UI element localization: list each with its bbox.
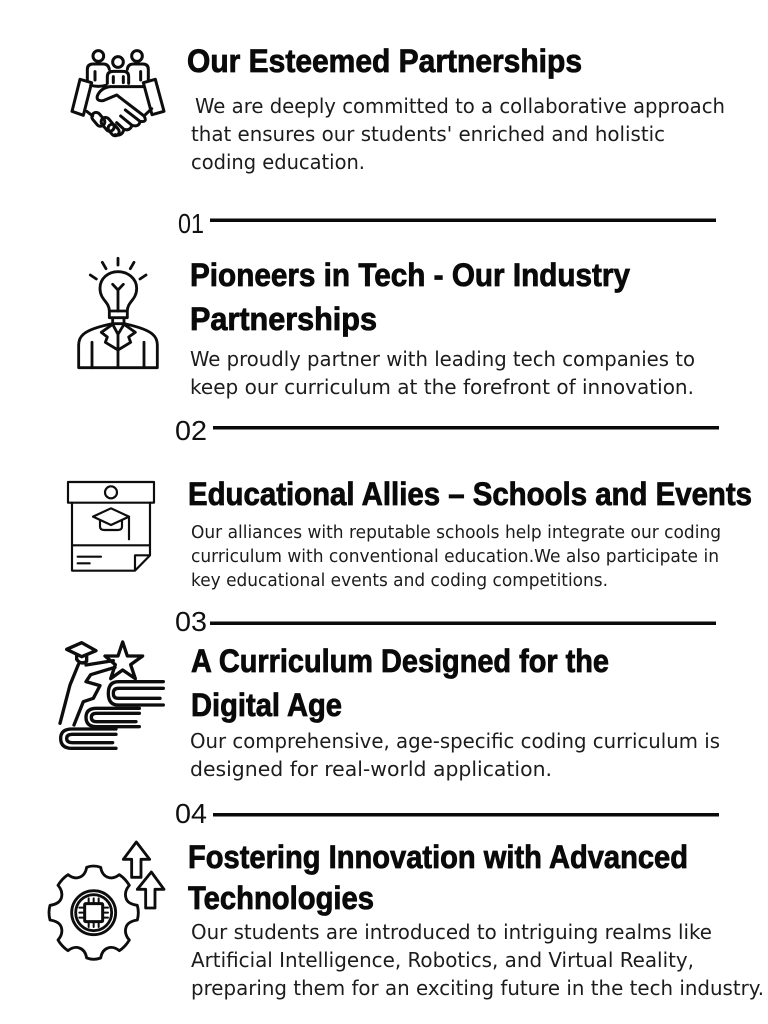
panel: curriculum (60, 642, 720, 781)
heading: Pioneers in Tech: Pioneers in Tech - Our Industry (190, 257, 630, 293)
text block: technologies description: Our students are introduced to intriguing realms like (191, 920, 712, 944)
text block: technologies description (191, 920, 764, 1000)
text block: technologies description: preparing them for an exciting future in the tech industry. (191, 976, 764, 1000)
text block: allies description: curriculum with conventional education.We also participate in (191, 547, 719, 567)
icon: gear with chip and up arrows (49, 842, 164, 959)
heading: Fostering Innovation (188, 839, 688, 916)
icon: graduation cap box (68, 482, 154, 571)
text block: allies description (191, 523, 721, 591)
text block: curriculum description: designed for real-world application. (190, 757, 552, 781)
heading: Our Esteemed Partnerships: Our Esteemed Partnerships (187, 43, 582, 79)
panel: educational allies (68, 476, 752, 591)
panel: industry partnerships (79, 257, 695, 399)
text block: industry description: keep our curriculum at the forefront of innovation. (190, 375, 694, 399)
text block: allies description: key educational events and coding competitions. (191, 571, 608, 591)
icon: handshake with three people (72, 51, 164, 137)
text block: technologies description: Artificial Intelligence, Robotics, and Virtual Reality, (191, 948, 694, 972)
heading: Pioneers in Tech: Partnerships (190, 301, 377, 337)
divider: 04: 04 (175, 798, 207, 829)
text block: allies description: Our alliances with reputable schools help integrate our coding (191, 523, 721, 543)
heading: Pioneers in Tech (190, 257, 630, 337)
panel: advanced technologies (49, 839, 764, 1000)
divider: 01 (178, 208, 716, 239)
divider: 02: 02 (175, 415, 207, 446)
text block: curriculum description: Our comprehensive, age-specific coding curriculum is (190, 729, 720, 753)
text block: curriculum description (190, 729, 720, 781)
icon: figure climbing books to star (60, 642, 163, 748)
heading: A Curriculum Designed: Digital Age (191, 687, 342, 723)
icon: lightbulb head person (79, 258, 157, 368)
divider: 02 (175, 415, 719, 446)
heading: A Curriculum Designed (191, 643, 609, 723)
divider: 01: 01 (178, 208, 204, 239)
text block: partnerships description: We are deeply committed to a collaborative approach (195, 94, 725, 118)
heading: Fostering Innovation: Technologies (188, 880, 374, 916)
text block: partnerships description: that ensures our students' enriched and holistic (191, 122, 665, 146)
text block: partnerships description: coding education. (191, 150, 365, 174)
heading: A Curriculum Designed: A Curriculum Designed for the (191, 643, 609, 679)
heading: Fostering Innovation: Fostering Innovation with Advanced (188, 839, 688, 875)
panel: esteemed partnerships (72, 43, 725, 174)
text block: partnerships description (191, 94, 725, 174)
divider: 03 (175, 606, 716, 637)
text block: industry description (190, 347, 695, 399)
text block: industry description: We proudly partner with leading tech companies to (190, 347, 695, 371)
divider: 03: 03 (175, 606, 207, 637)
divider: 04 (175, 798, 719, 829)
